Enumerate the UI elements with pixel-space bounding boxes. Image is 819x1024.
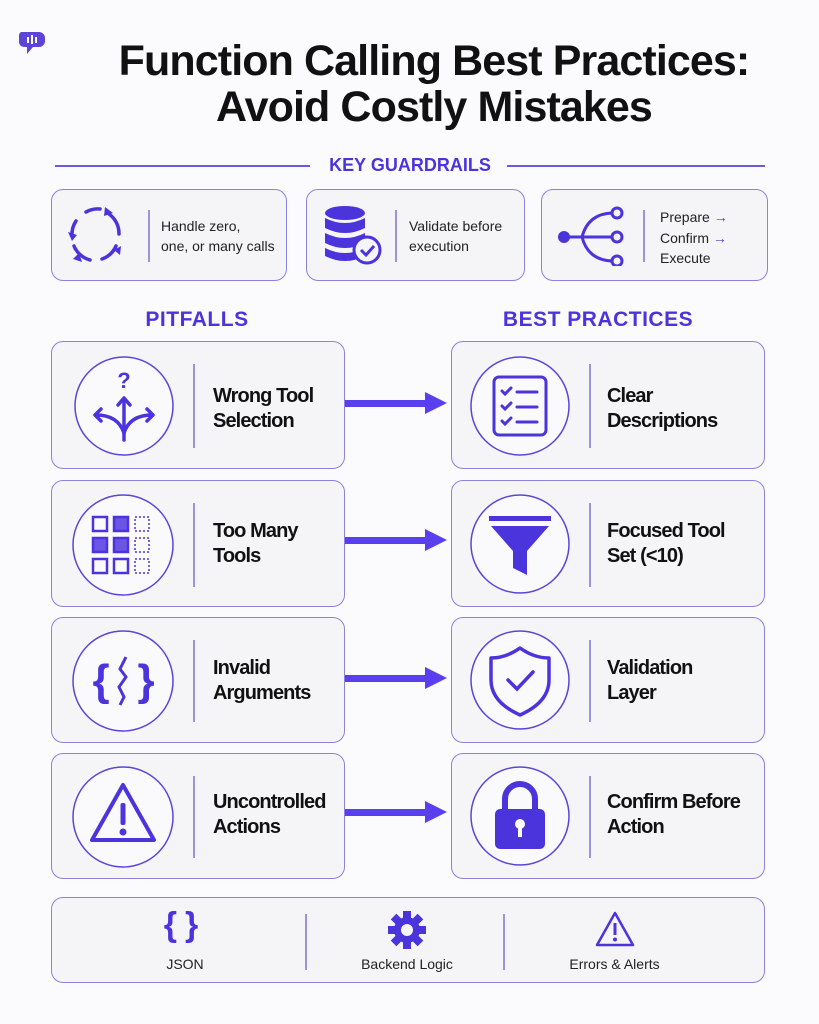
guardrail card 3 — [541, 189, 768, 281]
practice: clear descriptions: Descriptions — [607, 410, 717, 432]
icon: cycle arrows — [68, 207, 121, 262]
icon: forked arrows with question: ? — [117, 368, 131, 393]
practice: validation layer — [451, 617, 765, 743]
practice: confirm before action — [451, 753, 765, 879]
arrow 4 — [345, 809, 425, 816]
icon: branching nodes — [558, 206, 624, 266]
guardrail card 1 — [51, 189, 287, 281]
pitfall: invalid arguments: Invalid — [213, 657, 270, 679]
title: Function Calling Best Practices: — [119, 37, 749, 85]
practice: clear descriptions — [451, 341, 765, 469]
icon: checklist — [470, 356, 570, 456]
guardrail card 3: Confirm → — [660, 230, 727, 246]
icon: broken braces — [72, 630, 174, 732]
pitfall: wrong tool selection: Selection — [213, 410, 294, 432]
practice: focused tool set — [451, 480, 765, 607]
pitfall: uncontrolled actions: Uncontrolled — [213, 791, 326, 813]
icon: warning triangle — [72, 766, 174, 868]
item: JSON: {} — [164, 906, 206, 944]
arrow 1 — [345, 400, 425, 407]
heading: pitfalls: PITFALLS — [145, 308, 249, 331]
guardrail card 2 — [306, 189, 525, 281]
practice: validation layer: Layer — [607, 682, 656, 704]
pitfall: uncontrolled actions: Actions — [213, 816, 280, 838]
pitfall: wrong tool selection — [51, 341, 345, 469]
arrow 2 — [345, 537, 425, 544]
icon: grid of tools — [72, 494, 174, 596]
pitfall: invalid arguments — [51, 617, 345, 743]
item: JSON — [164, 906, 206, 972]
practice: confirm before action: Confirm Before — [607, 791, 740, 813]
guardrail card 1: one, or many calls — [161, 238, 275, 254]
logo icon — [18, 32, 45, 54]
icon: funnel — [470, 494, 570, 594]
icon: padlock — [470, 766, 570, 866]
pitfall: wrong tool selection: Wrong Tool — [213, 385, 313, 407]
item: errors & alerts: Errors & Alerts — [569, 956, 660, 972]
icon: database check — [325, 206, 382, 264]
item: JSON: JSON — [166, 956, 204, 972]
icon: shield check — [470, 630, 570, 730]
practice: clear descriptions: Clear — [607, 385, 653, 407]
pitfall: too many tools — [51, 480, 345, 607]
pitfall: invalid arguments: Arguments — [213, 682, 310, 704]
icon: broken braces: { — [92, 656, 110, 705]
arrow 3 — [345, 675, 425, 682]
guardrail card 2: Validate before — [409, 218, 502, 234]
guardrail card 3: Prepare → — [660, 209, 728, 225]
practice: focused tool set: Focused Tool — [607, 520, 725, 542]
practice: confirm before action: Action — [607, 816, 664, 838]
heading: best practices: BEST PRACTICES — [503, 308, 693, 331]
item: backend logic — [361, 911, 453, 972]
pitfall: too many tools: Tools — [213, 545, 260, 567]
practice: focused tool set: Set (<10) — [607, 545, 683, 567]
guardrail card 2: execution — [409, 238, 469, 254]
title: Avoid Costly Mistakes — [216, 83, 652, 131]
item: errors & alerts — [569, 912, 660, 972]
pitfall: too many tools: Too Many — [213, 520, 298, 542]
practice: validation layer: Validation — [607, 657, 692, 679]
guardrail card 3: Execute — [660, 250, 711, 266]
title — [119, 37, 749, 131]
section heading: key guardrails: KEY GUARDRAILS — [329, 155, 491, 175]
bottom panel: components — [51, 897, 765, 983]
pitfall: uncontrolled actions — [51, 753, 345, 879]
item: backend logic: Backend Logic — [361, 956, 453, 972]
guardrail card 1: Handle zero, — [161, 218, 240, 234]
icon: broken braces: } — [137, 656, 155, 705]
icon: forked arrows with question — [74, 356, 174, 456]
